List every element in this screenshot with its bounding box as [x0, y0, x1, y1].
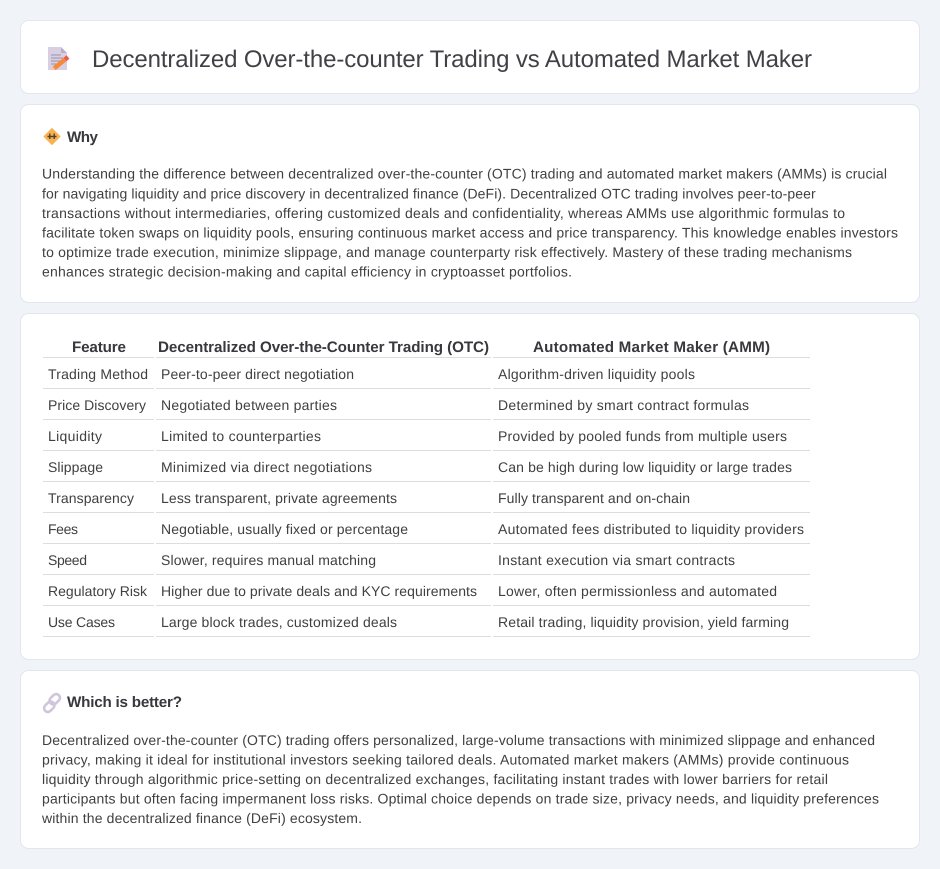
- table row: speed: Instant execution via smart contracts: [498, 552, 735, 568]
- table row: price discovery: Negotiated between parties: [161, 397, 337, 413]
- table row: price discovery: Price Discovery: [48, 397, 146, 413]
- table row: speed: Speed: [48, 552, 87, 568]
- icon: chain link: [43, 693, 61, 713]
- table row: slippage: Minimized via direct negotiations: [161, 459, 372, 475]
- table row: use cases: Use Cases: [48, 614, 115, 630]
- text block: why paragraph: for navigating liquidity and price discovery in decentralized finance (DeFi). Decentralized OTC trading involves peer-to-peer: [42, 185, 816, 201]
- text block: why paragraph: facilitate token swaps on liquidity pools, ensuring continuous market access and price transparency. This knowledge enables investors: [42, 224, 898, 240]
- text block: which is better paragraph: privacy, making it ideal for institutional investors seeking tailored deals. Automated market makers (AMMs) provide continuous: [42, 752, 849, 768]
- heading: which is better: Which is better?: [67, 694, 182, 711]
- table row: trading method: [43, 366, 810, 389]
- text block: which is better paragraph: liquidity through algorithmic price-setting on decentralized exchanges, facilitating instant trades with lower barriers for retail: [42, 771, 828, 787]
- table row: trading method: Algorithm-driven liquidity pools: [498, 366, 695, 382]
- table row: slippage: Slippage: [48, 459, 103, 475]
- table row: price discovery: [43, 397, 810, 420]
- table row: use cases: Large block trades, customized deals: [161, 614, 397, 630]
- table row: liquidity: [43, 428, 810, 451]
- table row: use cases: Retail trading, liquidity provision, yield farming: [498, 614, 789, 630]
- panel: which is better: [20, 670, 920, 848]
- table header: Decentralized Over-the-Counter Trading (OTC): [158, 339, 489, 356]
- table row: slippage: Can be high during low liquidity or large trades: [498, 459, 792, 475]
- table row: fees: Fees: [48, 521, 78, 537]
- text block: why paragraph: Understanding the difference between decentralized over-the-counter (OTC) trading and automated market makers (AMMs) is crucial: [42, 166, 887, 182]
- table row: fees: Automated fees distributed to liquidity providers: [498, 521, 804, 537]
- table row: transparency: Fully transparent and on-chain: [498, 490, 690, 506]
- table row: regulatory risk: [43, 583, 810, 606]
- table header: Feature: [72, 339, 126, 356]
- table row: regulatory risk: Lower, often permissionless and automated: [498, 583, 777, 599]
- panel: comparison table: [20, 314, 920, 660]
- text block: which is better paragraph: participants but often facing impermanent loss risks. Optimal choice depends on trade size, privacy needs, and liquidity preferences: [42, 790, 879, 806]
- title: Decentralized Over-the-counter Trading vs Automated Market Maker: [92, 46, 812, 73]
- table header: Automated Market Maker (AMM): [533, 339, 770, 356]
- text block: which is better paragraph: [41, 732, 879, 826]
- table row: fees: Negotiable, usually fixed or percentage: [161, 521, 408, 537]
- heading: why: Why: [67, 129, 99, 146]
- table header: [43, 339, 810, 358]
- text block: why paragraph: to optimize trade execution, minimize slippage, and manage counterparty risk effectively. Mastery of these trading mechanisms: [42, 244, 852, 260]
- table row: use cases: [43, 614, 810, 637]
- text block: which is better paragraph: Decentralized over-the-counter (OTC) trading offers personalized, large-volume transactions with minimized slippage and enhanced: [42, 732, 875, 748]
- table row: transparency: Transparency: [48, 490, 134, 506]
- table row: liquidity: Limited to counterparties: [161, 428, 321, 444]
- table row: price discovery: Determined by smart contract formulas: [498, 397, 749, 413]
- text block: which is better paragraph: within the decentralized finance (DeFi) ecosystem.: [41, 810, 362, 826]
- icon: warning diamond: [44, 128, 60, 144]
- text block: why paragraph: enhances strategic decision-making and capital efficiency in cryptoasset portfolios.: [42, 264, 572, 280]
- table row: trading method: Trading Method: [48, 366, 148, 382]
- table row: slippage: [43, 459, 810, 482]
- table row: transparency: Less transparent, private agreements: [161, 490, 397, 506]
- table row: regulatory risk: Higher due to private deals and KYC requirements: [161, 583, 477, 599]
- table row: trading method: Peer-to-peer direct negotiation: [161, 366, 354, 382]
- table row: speed: Slower, requires manual matching: [161, 552, 376, 568]
- table row: liquidity: Liquidity: [48, 428, 102, 444]
- table row: fees: [43, 521, 810, 544]
- table row: speed: [43, 552, 810, 575]
- table row: transparency: [43, 490, 810, 513]
- panel: why: [20, 104, 920, 302]
- text block: why paragraph: transactions without intermediaries, offering customized deals and confidentiality, whereas AMMs use algorithmic formulas to: [42, 205, 845, 221]
- panel: title card: [20, 20, 920, 94]
- text block: why paragraph: [42, 166, 898, 280]
- icon: document with pencil: [48, 47, 68, 70]
- table row: liquidity: Provided by pooled funds from multiple users: [498, 428, 787, 444]
- table row: regulatory risk: Regulatory Risk: [48, 583, 148, 599]
